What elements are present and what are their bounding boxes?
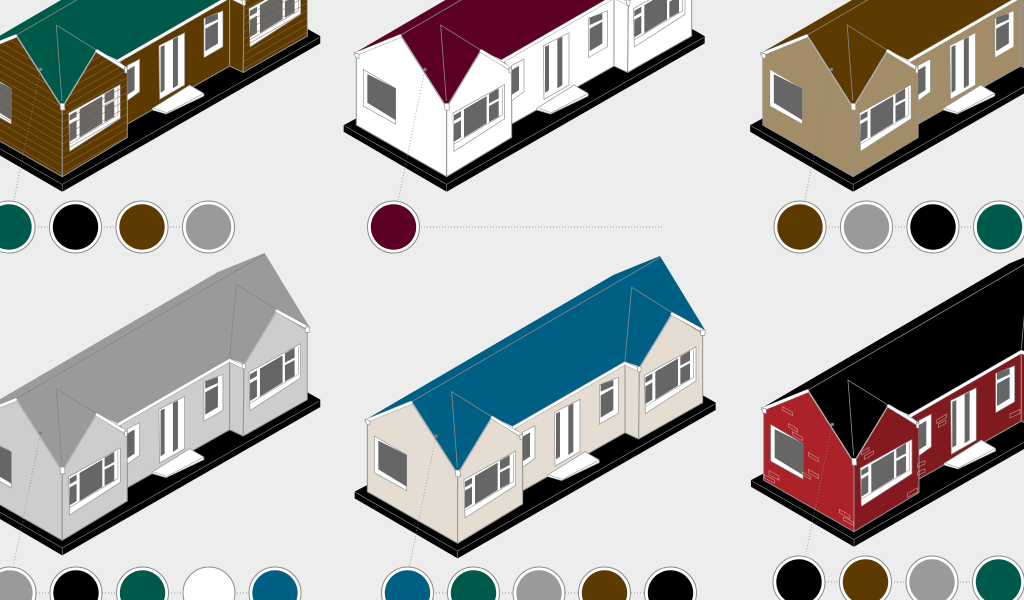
swatch: brown [840,556,892,600]
house: black roof, red brick walls [751,244,1024,555]
swatch: brown [116,201,168,253]
swatch: grey [0,567,36,600]
swatch: green [972,556,1024,600]
colour swatches: house 2 [368,201,663,253]
house: blue roof, cream walls [355,256,716,567]
colour swatches: house 3 [774,201,1024,253]
swatch: black [644,567,696,600]
swatch: green [974,201,1024,253]
swatch: grey [906,556,958,600]
colour swatches: house 4 [0,567,301,600]
swatch: black [907,201,959,253]
swatch: maroon [368,201,420,253]
swatch: green [448,567,500,600]
house: grey roof, light grey walls [0,253,320,564]
swatch: green [116,567,168,600]
house: maroon roof, white walls [344,0,705,200]
house: brown roof, tan walls [750,0,1024,200]
swatch: grey [182,201,234,253]
swatch: white [183,567,235,600]
swatch: brown [578,567,630,600]
swatch: grey [513,567,565,600]
swatch: brown [774,201,826,253]
swatch: black [50,567,102,600]
colour swatches: house 6 [773,556,1024,600]
swatch: green [0,201,35,253]
colour swatches: house 5 [382,567,696,600]
swatch: blue [382,567,434,600]
swatch: black [50,201,102,253]
swatch: blue [249,567,301,600]
house: green roof, brown timber cladding [0,0,320,200]
swatch: grey [840,201,892,253]
colour swatches: house 1 [0,201,234,253]
swatch: black [773,556,825,600]
